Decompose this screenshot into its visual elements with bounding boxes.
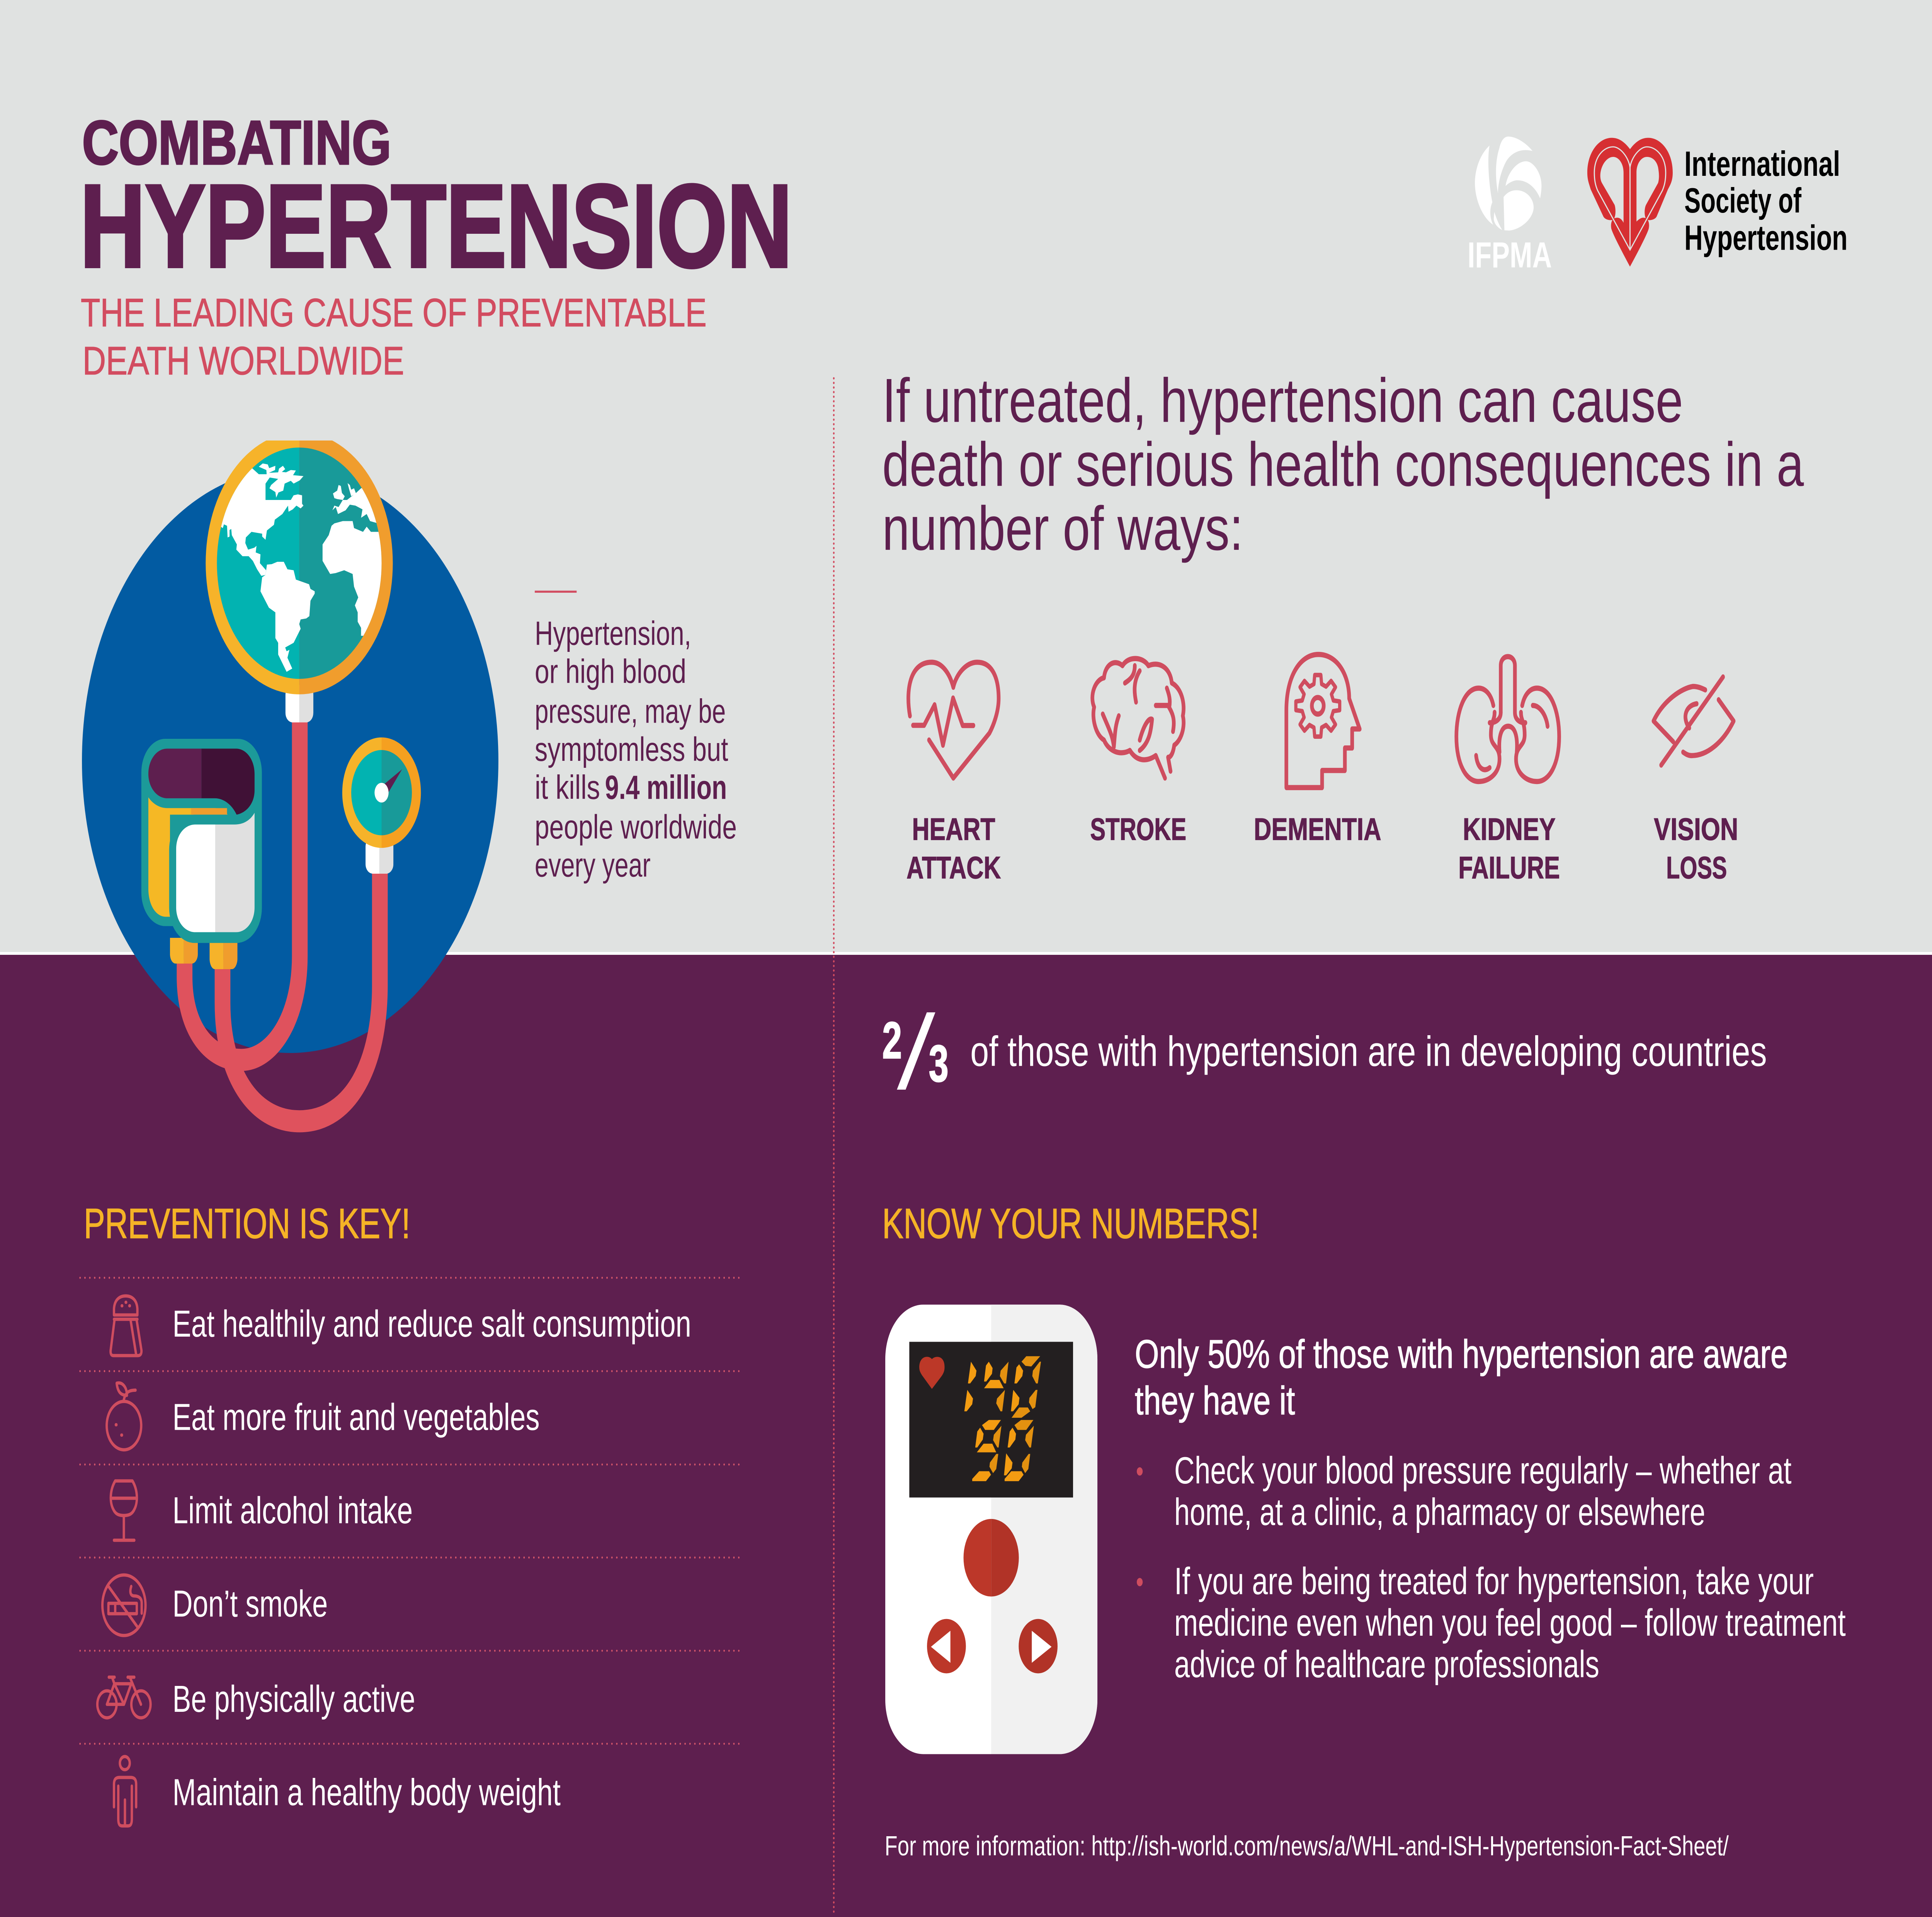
left button [927,1619,966,1674]
logo: IFPMA: IFPMA [1468,235,1552,276]
prevention list dividers [80,1278,740,1744]
prevention item: smoking: Don’t smoke [172,1582,328,1624]
footer link: For more information: http://ish-world.com/news/a/WHL-and-ISH-Hypertension-Fact-Sheet/ [885,1831,1729,1861]
icon: brain [1092,658,1184,778]
globe ring [206,432,393,694]
icon: head with gear [1286,655,1360,788]
title [80,107,792,291]
fraction: 2 [882,1011,902,1069]
consequence: kidney failure: FAILURE [1458,850,1560,885]
subtitle [81,290,707,383]
globe ocean [217,447,381,679]
text block: hypertension description: every year [535,846,651,884]
reading: 90 [972,1420,1024,1481]
bullet: take medicine: medicine even when you feel good – follow treatment [1174,1602,1846,1644]
heading: consequences [882,366,1804,563]
logo text: International [1684,144,1840,184]
logo text: Hypertension [1684,218,1848,257]
panel divider [0,952,1932,955]
bullet: check blood pressure: Check your blood pressure regularly – whether at [1174,1450,1792,1492]
blood pressure monitor [885,1305,1097,1754]
prevention item: body weight: Maintain a healthy body weight [172,1771,561,1813]
prevention item: alcohol [111,1481,413,1540]
prevention item: salt [111,1296,691,1356]
prevention item: salt: Eat healthily and reduce salt consumption [172,1302,691,1345]
heading: consequences: death or serious health consequences in a [882,429,1804,499]
text block: hypertension description: it kills [535,769,600,806]
heading: consequences: number of ways: [882,493,1243,563]
icon: heart arrow [1587,138,1673,267]
text block: hypertension description: symptomless but [535,731,728,768]
heading: prevention is key: PREVENTION IS KEY! [84,1200,410,1247]
consequence: dementia: DEMENTIA [1254,812,1381,847]
reading: 140 [964,1362,1023,1411]
consequence: stroke: STROKE [1090,812,1186,847]
blue circle [82,469,498,1053]
logo: International Society of Hypertension [1587,138,1848,267]
cuff [141,739,262,943]
logo: IFPMA [1468,136,1552,276]
title line: combating: COMBATING [82,107,391,177]
consequence: vision loss [1653,677,1738,885]
right button [1019,1619,1058,1674]
text block: hypertension description: or high blood [535,653,686,691]
awareness statement [1135,1332,1788,1423]
title line: hypertension: HYPERTENSION [80,160,792,291]
consequence: stroke [1090,658,1186,847]
cuff fittings [170,938,237,969]
consequence: heart attack [906,662,1001,885]
subtitle: THE LEADING CAUSE OF PREVENTABLE [81,290,707,335]
icon: kidneys [1456,657,1559,782]
heading: know your numbers: KNOW YOUR NUMBERS! [882,1200,1259,1247]
statistic: two thirds [882,1011,1767,1092]
prevention item: fruit [107,1383,540,1450]
bullet: check blood pressure [1137,1450,1792,1533]
statistic: two thirds: of those with hypertension are in developing countries [970,1028,1767,1075]
gauge dial [342,737,421,848]
monitor screen [909,1342,1073,1497]
consequence: dementia [1254,655,1381,847]
prevention item: activity: Be physically active [172,1677,415,1720]
illustration: globe stethoscope and cuff [82,432,498,1121]
globe continents [209,463,386,672]
icon: fruit [107,1383,141,1450]
fraction [882,1011,949,1092]
prevention item: fruit: Eat more fruit and vegetables [172,1396,540,1438]
consequence: vision loss: VISION [1654,812,1738,847]
prevention item: smoking [102,1575,328,1636]
text block: hypertension description: 9.4 million [605,769,727,806]
logo text: Society of [1684,180,1801,220]
icon: bicycle [97,1677,151,1718]
icon: salt shaker [111,1296,141,1356]
icon: heart on screen [919,1357,945,1389]
consequence: vision loss: LOSS [1666,850,1727,885]
icon: no smoking [102,1575,146,1636]
consequence: heart attack: ATTACK [906,850,1001,885]
text block: hypertension description: Hypertension, [535,615,691,653]
consequence: kidney failure [1456,657,1560,885]
subtitle: DEATH WORLDWIDE [83,338,404,383]
icon: crossed eye [1653,677,1734,765]
text block: hypertension description: people worldwide [535,808,737,846]
prevention item: body weight [114,1757,561,1826]
consequence: kidney failure: KIDNEY [1463,812,1556,847]
background: lower purple panel [0,955,1932,1917]
fraction: 3 [929,1034,949,1092]
awareness statement: Only 50% of those with hypertension are aware [1135,1332,1788,1376]
icon: heart with pulse [908,662,999,778]
stethoscope tubes [185,718,380,1121]
bullet: take medicine [1137,1560,1846,1686]
vertical dotted divider [833,378,834,1916]
background: upper grey panel [0,0,1932,953]
awareness statement: they have it [1135,1378,1295,1423]
text block: hypertension description: pressure, may be [535,692,726,730]
icon: wine glass [111,1481,137,1540]
text block: hypertension description [535,591,737,884]
icon: person [114,1757,136,1826]
consequence: heart attack: HEART [912,812,995,847]
bullet: take medicine: advice of healthcare professionals [1174,1643,1599,1686]
gauge stem [366,837,393,874]
logo text [1684,144,1848,257]
bullet: check blood pressure: home, at a clinic, a pharmacy or elsewhere [1174,1491,1705,1533]
prevention item: alcohol: Limit alcohol intake [172,1489,413,1531]
heading: consequences: If untreated, hypertension can cause [882,366,1683,435]
bullet: take medicine: If you are being treated for hypertension, take your [1174,1560,1814,1602]
monitor body [885,1305,1097,1754]
main button [964,1519,1019,1597]
globe stem [286,685,313,723]
